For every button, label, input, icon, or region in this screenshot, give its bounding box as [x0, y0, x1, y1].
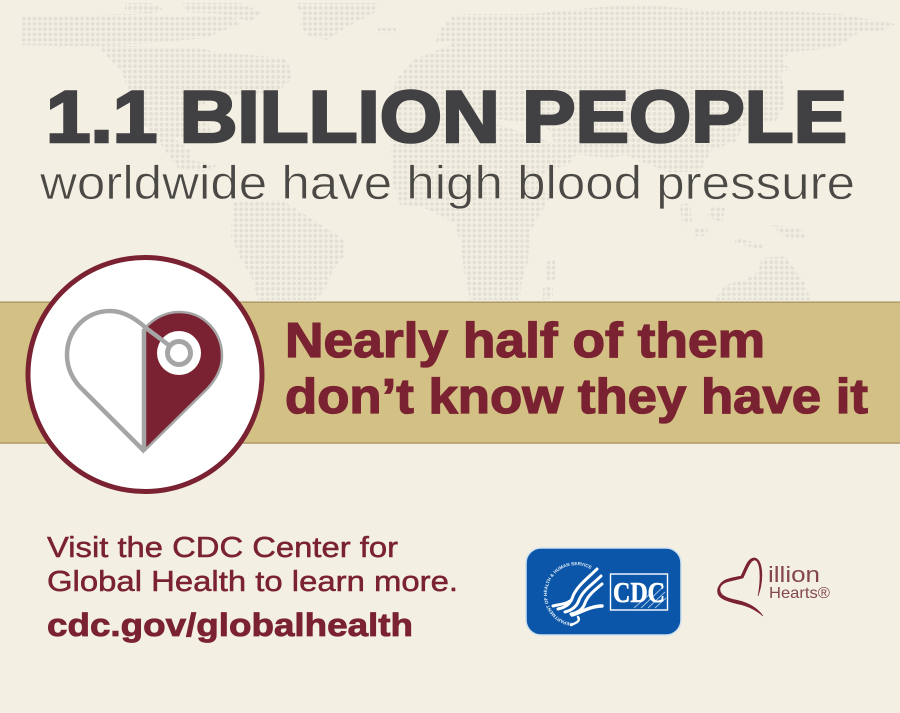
icon: half-filled heart in circle [28, 258, 262, 492]
logo: Million Hearts: Hearts® [769, 585, 830, 602]
subtitle: worldwide have high blood pressure [39, 156, 855, 209]
logo: HHS and CDC: CDC [613, 578, 665, 609]
logo: HHS and CDC: DEPARTMENT OF HEALTH & HUMAN SERVICES USA [544, 562, 592, 626]
dotted world map [0, 0, 900, 302]
banner message: Nearly half of them [285, 314, 765, 368]
call to action text: Visit the CDC Center for [47, 532, 398, 564]
call to action text: Global Health to learn more. [47, 566, 458, 598]
banner message: don’t know they have it [285, 370, 868, 424]
gold banner [0, 302, 900, 444]
banner message [285, 314, 868, 424]
title: 1.1 billion people: 1.1 BILLION PEOPLE [46, 77, 847, 158]
call to action text [47, 532, 458, 643]
logo: HHS and CDC [525, 547, 682, 636]
logo: Million Hearts [718, 558, 830, 616]
logo: Million Hearts: illion [768, 562, 820, 587]
call to action text: cdc.gov/globalhealth [47, 607, 413, 643]
